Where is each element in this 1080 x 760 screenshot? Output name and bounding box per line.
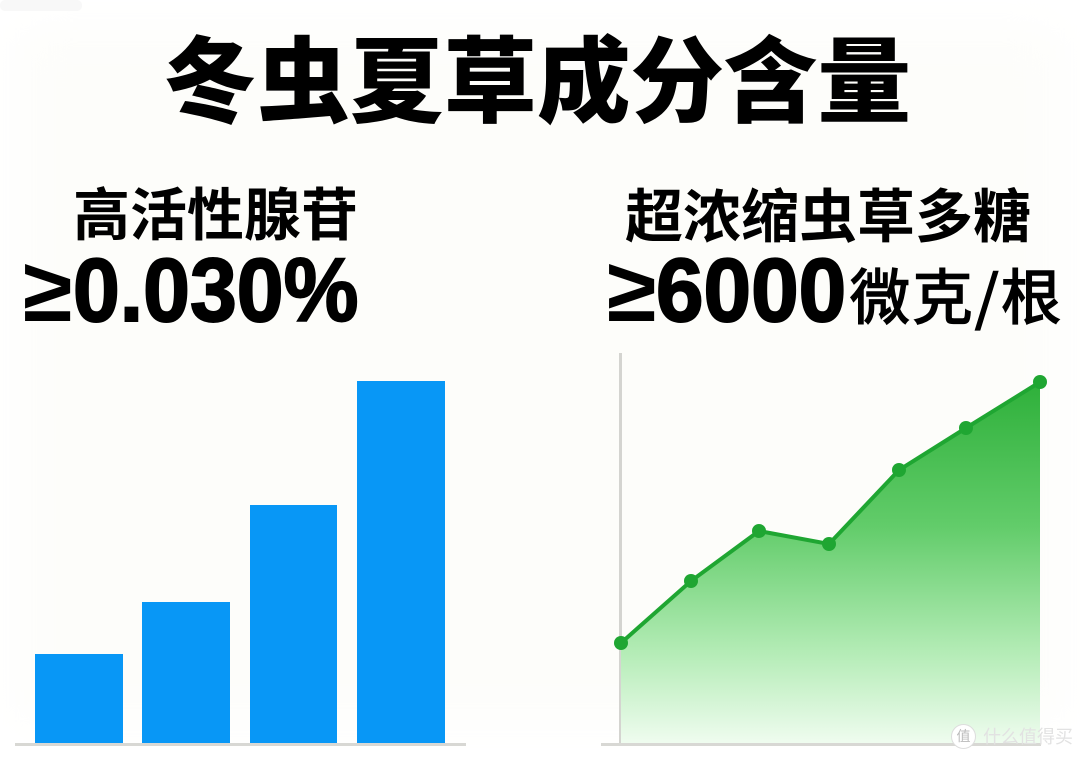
watermark: 值 xyxy=(956,726,970,746)
bar 3 xyxy=(250,505,337,743)
watermark: 什么值得买 xyxy=(983,723,1073,749)
value: adenosine content: ≥ xyxy=(23,241,72,341)
axes xyxy=(619,353,622,744)
value: polysaccharide content: ≥ xyxy=(607,241,656,341)
heading: adenosine: 高活性腺苷 xyxy=(73,170,358,252)
value: polysaccharide content: 6000 xyxy=(656,241,846,341)
heading: polysaccharide: 超浓缩虫草多糖 xyxy=(625,170,1031,254)
area line chart xyxy=(601,353,1047,746)
title: 冬虫夏草成分含量 xyxy=(163,7,911,142)
green area xyxy=(621,382,1040,743)
bar 4 xyxy=(357,381,445,743)
bar 1 xyxy=(35,654,123,743)
trend line xyxy=(621,382,1040,643)
bar chart xyxy=(15,381,466,746)
data points xyxy=(614,375,1047,650)
value: adenosine content: 0.030% xyxy=(73,241,358,341)
bar 2 xyxy=(142,602,230,743)
value: polysaccharide content xyxy=(607,241,1064,341)
value: polysaccharide content: 微克/根 xyxy=(850,250,1064,337)
axis xyxy=(15,743,466,746)
